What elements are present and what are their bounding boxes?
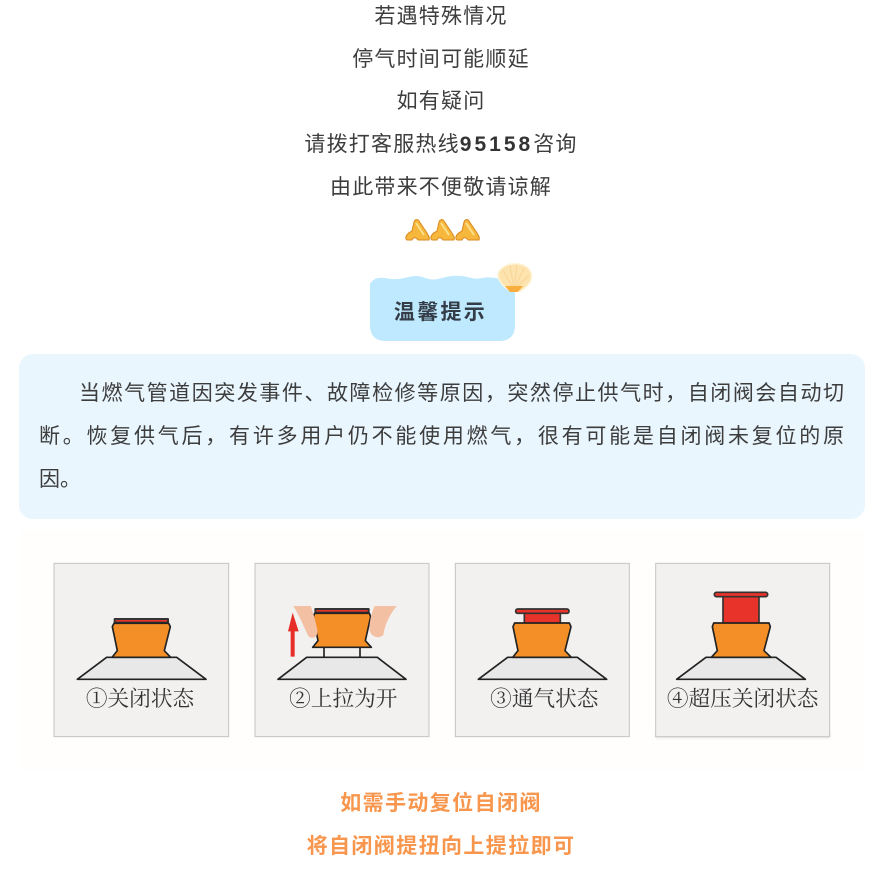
heading text: 温馨提示 <box>394 301 487 324</box>
line: apology: 由此带来不便敬请谅解 <box>330 176 552 199</box>
instruction text <box>307 792 575 858</box>
explanation line 2: 断。恢复供气后，有许多用户仍不能使用燃气，很有可能是自闭阀未复位的原 <box>39 425 844 448</box>
instruction line 1: 如需手动复位自闭阀 <box>340 792 542 815</box>
line: customer service hotline: 请拨打客服热线95158咨询 <box>304 133 578 156</box>
label: ③通气状态 <box>490 687 600 711</box>
line: special circumstances: 若遇特殊情况 <box>374 5 508 28</box>
panel: explanation <box>19 354 865 519</box>
line: questions: 如有疑问 <box>397 90 485 113</box>
notice text block <box>304 5 578 199</box>
line: possible delay: 停气时间可能顺延 <box>352 48 530 71</box>
panel: valve states diagram <box>20 530 865 770</box>
explanation line 3: 因。 <box>39 468 81 491</box>
diagram artwork <box>54 562 830 739</box>
valve state 2: pull up to open <box>255 563 429 737</box>
explanation line 1: 当燃气管道因突发事件、故障检修等原因，突然停止供气时，自闭阀会自动切 <box>79 382 844 405</box>
valve state 3: venting <box>455 563 629 737</box>
valve state 4: over-pressure closed <box>656 563 830 738</box>
valve state 1: closed <box>54 563 229 737</box>
label: ②上拉为开 <box>289 687 398 711</box>
label: ④超压关闭状态 <box>667 687 820 711</box>
label: ①关闭状态 <box>86 687 195 711</box>
instruction line 2: 将自闭阀提扭向上提拉即可 <box>307 835 575 858</box>
